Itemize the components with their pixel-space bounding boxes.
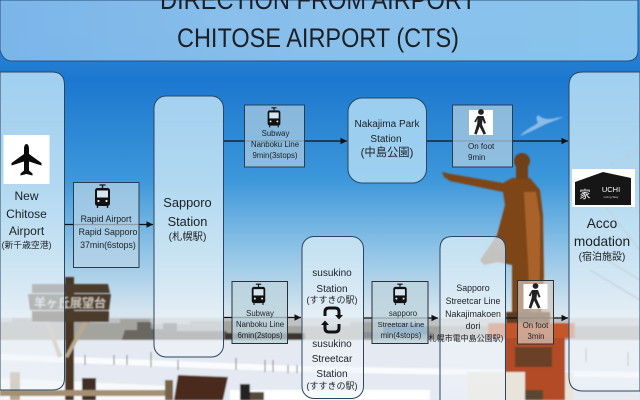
panel: susukino Station: susukino [312, 339, 352, 350]
connector lines and arrows [65, 141, 568, 318]
box: On foot 9min: On foot [468, 142, 495, 151]
label: New Chitose Airport: Chitose [6, 207, 47, 221]
panel: Sapporo Streetcar Line Nakajimakoen dori: dori [466, 321, 480, 331]
fence posts [85, 348, 628, 373]
icon: transfer [321, 308, 343, 332]
panel: Accommodation: (宿泊施設) [579, 250, 625, 263]
panel: Sapporo Streetcar Line Nakajimakoen dori: Nakajimakoen [445, 309, 501, 319]
panel: Sapporo Streetcar Line Nakajimakoen dori: Sapporo [456, 283, 490, 293]
panel: susukino Station: Station [316, 284, 348, 295]
cloud [520, 115, 564, 136]
icon: UCHI logo: 家 [580, 187, 590, 201]
box: Subway Nanboku Line 9min: Nanboku Line [251, 140, 299, 149]
box: Subway Nanboku Line 9min: Subway [262, 129, 289, 138]
panel: susukino Station: susukino [312, 268, 352, 279]
box: Subway Nanboku Line 9min: 9min(3stops) [252, 151, 298, 160]
panel: susukino Station: Station [316, 369, 348, 380]
title [160, 0, 476, 53]
panel: Accommodation [569, 72, 640, 391]
box: Rapid Airport: Rapid Airport [81, 214, 132, 224]
wooden sign: 羊ヶ丘展望台 [34, 295, 106, 310]
box: On foot 9min: 9min [468, 153, 485, 162]
panel: Sapporo Streetcar Line Nakajimakoen dori: 札幌市電中島公園駅) [429, 333, 504, 343]
bare tree [585, 125, 640, 300]
label: New Chitose Airport: Airport [9, 224, 45, 238]
box: Rapid Airport: Rapid Sapporo [79, 227, 137, 237]
panel: Accommodation: modation [574, 234, 630, 249]
box: On foot 3min: On foot [523, 321, 549, 330]
panel: Sapporo Station: Sapporo [163, 195, 212, 210]
box: Subway Nanboku Line 6min: 6min(2stops) [237, 331, 283, 340]
panel: susukino Station [302, 236, 364, 398]
box: On foot 3min [518, 280, 554, 344]
icon: airplane [4, 135, 50, 184]
panel: Sapporo Station: Station [168, 214, 207, 229]
panel: Sapporo Streetcar Line Nakajimakoen dori: Streetcar Line [446, 296, 500, 306]
panel: Sapporo Station [154, 96, 224, 357]
header panel [0, 0, 638, 61]
box: sapporo Streetcar Line: Streetcar Line [378, 320, 424, 329]
label: New Chitose Airport: (新千歳空港) [2, 239, 51, 250]
panel: susukino Station: (すすきの駅) [306, 381, 358, 391]
icon: UCHI logo: Living Stay [604, 195, 619, 199]
box: sapporo Streetcar Line: min(4stops) [381, 331, 422, 340]
panel: Sapporo Station: (札幌駅) [169, 230, 206, 243]
statue of Clark [442, 153, 575, 400]
panel: Nakajima Park Station: (中島公園) [361, 145, 414, 159]
panel: New Chitose Airport [0, 72, 64, 390]
box: Subway Nanboku Line 6min: Nanboku Line [236, 320, 284, 329]
label: New Chitose Airport [2, 189, 51, 250]
box: Subway Nanboku Line 6min: Subway [246, 309, 274, 318]
panel: Nakajima Park Station: Station [370, 134, 402, 145]
box: Subway Nanboku Line 6min [232, 282, 288, 344]
label: New Chitose Airport: New [14, 189, 39, 203]
panel: Sapporo Streetcar Line Nakajimakoen dori [429, 236, 506, 400]
box: On foot 3min: 3min [528, 332, 544, 341]
box: Subway Nanboku Line 9min [244, 105, 304, 167]
box: On foot 9min [452, 105, 512, 167]
icon: UCHI logo: UCHI [602, 185, 620, 194]
panel: Nakajima Park Station: Nakajima Park [354, 119, 421, 130]
panel: susukino Station: (すすきの駅) [306, 295, 358, 305]
icon: UCHI logo [572, 169, 635, 207]
box: Rapid Airport: 37min(6stops) [80, 240, 136, 250]
panel: Nakajima Park Station [348, 98, 426, 183]
wooden sign [0, 277, 264, 400]
title: CHITOSE AIRPORT (CTS) [177, 23, 459, 53]
box: sapporo Streetcar Line [372, 282, 428, 344]
panel: susukino Station: Streetcar [312, 354, 353, 365]
panel: Accommodation: Acco [587, 216, 618, 231]
box: sapporo Streetcar Line: sapporo [389, 309, 418, 318]
box: Rapid Airport [74, 182, 139, 268]
